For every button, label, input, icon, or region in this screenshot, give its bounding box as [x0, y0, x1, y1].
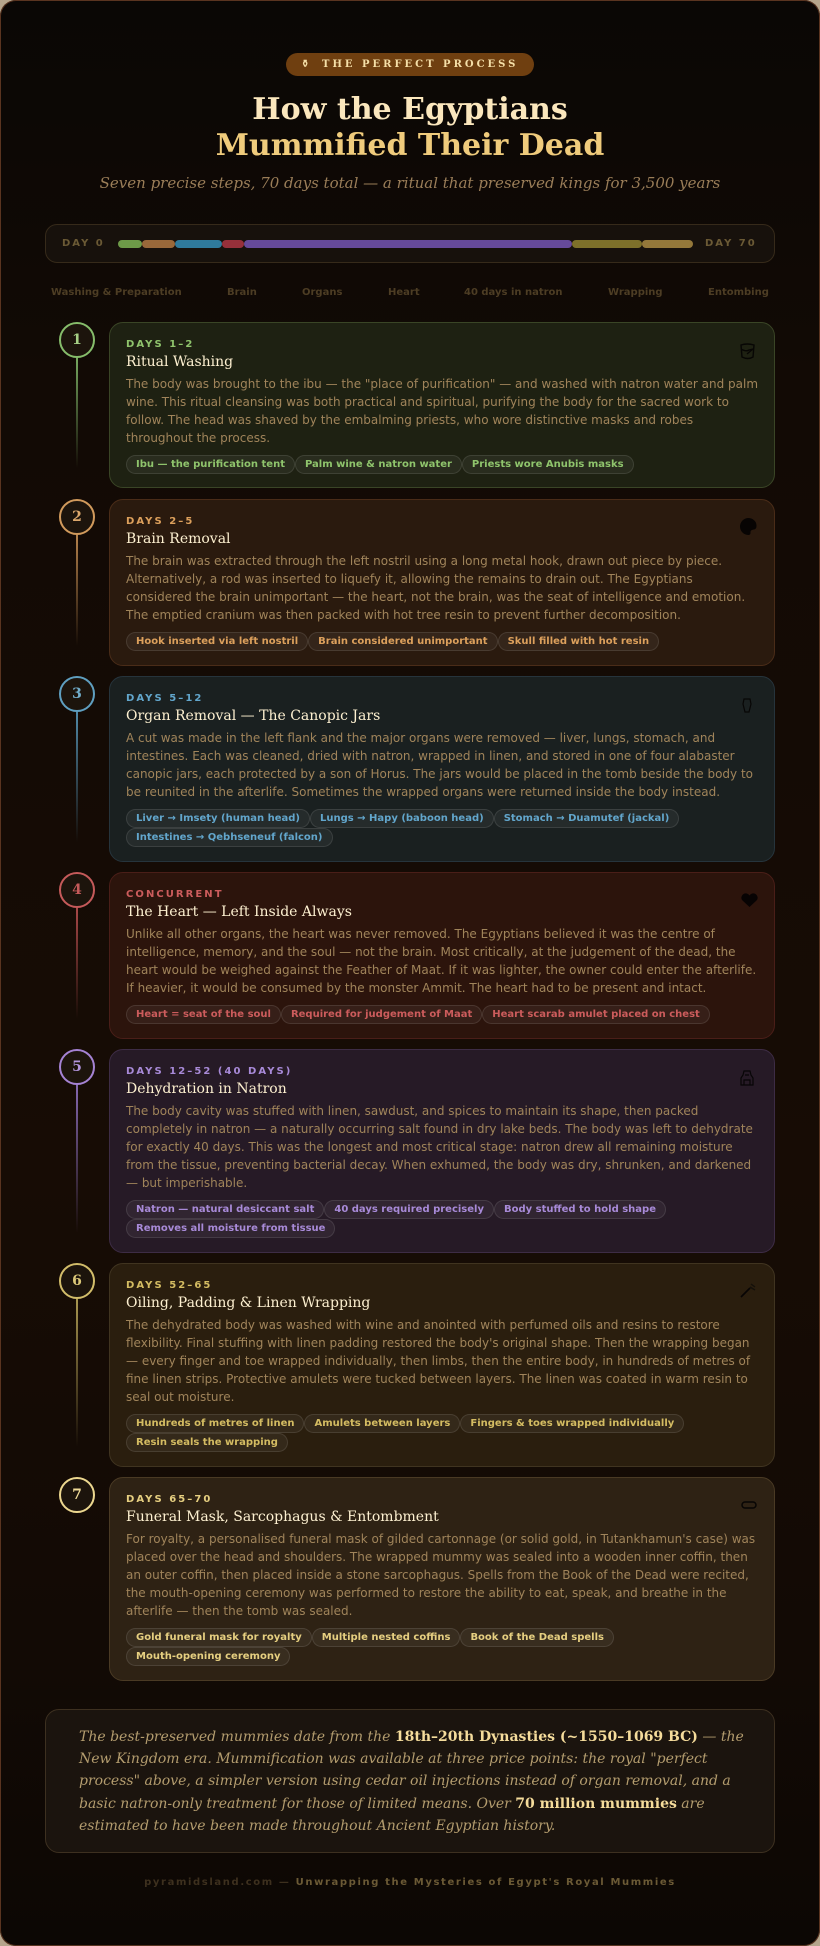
- body text: from the tissue, preventing bacterial decay. When exhumed, the body was dry, shrunken, and darkened: [126, 1158, 751, 1172]
- body text: The brain was extracted through the left nostril using a long metal hook, drawn out piece by piece.: [126, 554, 722, 568]
- badge: the perfect process: [286, 53, 534, 76]
- closing note panel: basic natron-only treatment for those of limited means. Over 70 million mummies are: [79, 1796, 705, 1812]
- tags: Multiple nested coffins: [322, 1632, 450, 1643]
- tags: Lungs → Hapy (baboon head): [320, 813, 484, 824]
- tags: Mouth-opening ceremony: [136, 1651, 280, 1662]
- tags: Priests wore Anubis masks: [472, 459, 624, 470]
- timeline segment: wrapping: [572, 240, 642, 248]
- step 3: organ removal: [59, 676, 775, 862]
- connector line 4: [76, 908, 78, 1019]
- closing note panel: [45, 1709, 775, 1853]
- tags: [126, 632, 659, 651]
- body text: The body was brought to the ibu — the "place of purification" — and washed with natron water and palm: [126, 377, 758, 391]
- step number 6: [59, 1263, 95, 1299]
- icon: heart: [741, 893, 758, 907]
- body text: [126, 731, 753, 799]
- icon: salt: [740, 1070, 754, 1086]
- subtitle: Seven precise steps, 70 days total — a ritual that preserved kings for 3,500 years: [100, 174, 720, 192]
- connector line 6: [76, 1299, 78, 1447]
- step 2: brain removal: [59, 499, 775, 666]
- connector line 5: [76, 1085, 78, 1233]
- footer: pyramidsland.com — Unwrapping the Mysteries of Egypt's Royal Mummies: [144, 1877, 676, 1888]
- tags: [126, 809, 679, 847]
- body text: intelligence, memory, and the soul — not the brain. Most critically, at the judgement of the dead, the: [126, 945, 736, 959]
- tags: Brain considered unimportant: [318, 636, 488, 647]
- body text: an outer coffin, then placed inside a stone sarcophagus. Spells from the Book of the Dead were recited,: [126, 1568, 749, 1582]
- card: ritual washing: [109, 322, 775, 488]
- tags: Intestines → Qebhseneuf (falcon): [136, 832, 322, 843]
- tags: Required for judgement of Maat: [291, 1009, 472, 1020]
- step number 7: [59, 1477, 95, 1513]
- card: organ removal: [109, 676, 775, 862]
- body text: A cut was made in the left flank and the major organs were removed — liver, lungs, stomach, and: [126, 731, 715, 745]
- timeline start label: DAY 0: [62, 238, 105, 249]
- timeline segment: heart: [222, 240, 244, 248]
- title: Mummified Their Dead: [216, 128, 604, 163]
- body text: the mouth-opening ceremony was performed to restore the ability to eat, speak, and breathe in the: [126, 1586, 727, 1600]
- body text: [126, 1532, 755, 1618]
- body text: — but imperishable.: [126, 1176, 247, 1190]
- connector line 1: [76, 358, 78, 468]
- tags: Ibu — the purification tent: [136, 459, 285, 470]
- tags: 40 days required precisely: [334, 1204, 484, 1215]
- body text: The body cavity was stuffed with linen, sawdust, and spices to maintain its shape, then packed: [126, 1104, 698, 1118]
- body text: The dehydrated body was washed with wine and anointed with perfumed oils and resins to restore: [126, 1318, 720, 1332]
- tags: Stomach → Duamutef (jackal): [504, 813, 669, 824]
- card: wrapping: [109, 1263, 775, 1467]
- timeline label: wrapping: Wrapping: [608, 287, 663, 298]
- step number 6: 6: [72, 1273, 82, 1289]
- tags: Body stuffed to hold shape: [504, 1204, 656, 1215]
- timeline segment: entombing: [642, 240, 693, 248]
- card: funeral mask: [109, 1477, 775, 1681]
- body text: [126, 377, 758, 445]
- timeline label: brain: Brain: [227, 287, 257, 298]
- card: the heart: [109, 872, 775, 1039]
- body text: flexibility. Final stuffing with linen padding restored the body's original shape. Then the wrapping began: [126, 1336, 750, 1350]
- step number 3: [59, 676, 95, 712]
- tags: Skull filled with hot resin: [508, 636, 649, 647]
- tags: Hundreds of metres of linen: [136, 1418, 294, 1429]
- step number 5: 5: [72, 1059, 82, 1075]
- tags: Heart = seat of the soul: [136, 1009, 271, 1020]
- icon: basin: [740, 343, 755, 360]
- card: brain removal: [109, 499, 775, 666]
- tags: [126, 455, 634, 474]
- heading: The Heart — Left Inside Always: [126, 904, 352, 920]
- title: How the Egyptians: [252, 92, 568, 127]
- body text: intestines. Each was cleaned, dried with natron, wrapped in linen, and stored in one of four alabaster: [126, 749, 735, 763]
- body text: For royalty, a personalised funeral mask of gilded cartonnage (or solid gold, in Tutankhamun's case) was: [126, 1532, 755, 1546]
- icon: wand: [740, 1284, 756, 1298]
- body text: Alternatively, a rod was inserted to liquefy it, allowing the remains to drain out. The Egyptians: [126, 572, 693, 586]
- timeline label: entombing: Entombing: [708, 287, 769, 298]
- tags: [126, 1628, 614, 1666]
- date label: DAYS 12–52 (40 DAYS): [126, 1066, 292, 1077]
- icon: brain: [740, 518, 756, 535]
- tags: Resin seals the wrapping: [136, 1437, 278, 1448]
- step 1: ritual washing: [59, 322, 775, 488]
- tags: Fingers & toes wrapped individually: [470, 1418, 674, 1429]
- body text: The emptied cranium was then packed with hot tree resin to prevent further decomposition.: [126, 608, 681, 622]
- card: dehydration: [109, 1049, 775, 1253]
- icon: coffin: [741, 1501, 757, 1509]
- body text: fine linen strips. Protective amulets were tucked between layers. The linen was coated in warm resin to: [126, 1372, 748, 1386]
- body text: [126, 927, 756, 995]
- badge: the perfect process: THE PERFECT PROCESS: [322, 59, 518, 70]
- body text: throughout the process.: [126, 431, 270, 445]
- tags: Removes all moisture from tissue: [136, 1223, 325, 1234]
- body text: placed over the head and shoulders. The wrapped mummy was sealed into a wooden inner coffin, then: [126, 1550, 748, 1564]
- timeline segment: organs: [175, 240, 222, 248]
- step 5: dehydration in natron: [59, 1049, 775, 1253]
- timeline end label: DAY 70: [705, 238, 757, 249]
- step number 3: 3: [72, 686, 82, 702]
- closing note panel: New Kingdom era. Mummification was available at three price points: the royal "perfect: [79, 1751, 708, 1767]
- step number 7: 7: [72, 1487, 82, 1503]
- body text: afterlife — then the tomb was sealed.: [126, 1604, 352, 1618]
- step number 4: 4: [72, 882, 82, 898]
- tags: [126, 1200, 666, 1238]
- tags: [126, 1005, 710, 1024]
- badge: the perfect process: ⚱: [301, 59, 309, 70]
- body text: If heavier, it would be consumed by the monster Ammit. The heart had to be present and intact.: [126, 981, 706, 995]
- date label: DAYS 65–70: [126, 1494, 212, 1505]
- tags: Amulets between layers: [314, 1418, 450, 1429]
- tags: Hook inserted via left nostril: [136, 636, 298, 647]
- step number 1: 1: [72, 332, 82, 348]
- step number 2: 2: [72, 509, 82, 525]
- step 6: oiling and wrapping: [59, 1263, 775, 1467]
- date label: DAYS 1–2: [126, 339, 194, 350]
- body text: be reunited in the afterlife. Sometimes the wrapped organs were returned inside the body instead.: [126, 785, 720, 799]
- timeline bar panel: [45, 224, 775, 263]
- tags: Palm wine & natron water: [305, 459, 452, 470]
- closing note panel: The best-preserved mummies date from the 18th–20th Dynasties (~1550–1069 BC) — the: [79, 1728, 744, 1744]
- step 4: the heart: [59, 872, 775, 1039]
- body text: [126, 554, 745, 622]
- tags: [126, 1414, 684, 1452]
- body text: [126, 1318, 750, 1404]
- body text: [126, 1104, 753, 1190]
- tags: Liver → Imsety (human head): [136, 813, 300, 824]
- timeline segment: natron: [244, 240, 572, 248]
- step number 5: [59, 1049, 95, 1085]
- closing note panel: estimated to have been made throughout Ancient Egyptian history.: [79, 1818, 555, 1834]
- tags: Gold funeral mask for royalty: [136, 1632, 302, 1643]
- date label: DAYS 52–65: [126, 1280, 212, 1291]
- heading: Brain Removal: [126, 531, 231, 547]
- icon: canopic jar: [742, 698, 752, 712]
- body text: follow. The head was shaved by the embalming priests, who wore distinctive masks and robes: [126, 413, 693, 427]
- date label: CONCURRENT: [126, 889, 224, 900]
- body text: completely in natron — a naturally occurring salt found in dry lake beds. The body was left to dehydrate: [126, 1122, 753, 1136]
- timeline label: natron: 40 days in natron: [464, 287, 563, 298]
- step 7: funeral mask: [59, 1477, 775, 1681]
- heading: Ritual Washing: [126, 354, 233, 370]
- timeline label: organs: Organs: [302, 287, 342, 298]
- title: [216, 92, 604, 163]
- closing note panel: process" above, a simpler version using cedar oil injections instead of organ removal, and a: [79, 1773, 731, 1789]
- timeline label: washing: Washing & Preparation: [51, 287, 182, 298]
- timeline segment: washing: [118, 240, 142, 248]
- heading: Dehydration in Natron: [126, 1081, 287, 1097]
- heading: Funeral Mask, Sarcophagus & Entombment: [126, 1509, 439, 1525]
- body text: canopic jars, each protected by a son of Horus. The jars would be placed in the tomb beside the body to: [126, 767, 753, 781]
- body text: heart would be weighed against the Feather of Maat. If it was lighter, the owner could enter the afterlife.: [126, 963, 756, 977]
- body text: — every finger and toe wrapped individually, then limbs, then the entire body, in hundreds of metres of: [126, 1354, 750, 1368]
- step number 2: [59, 499, 95, 535]
- connector line 2: [76, 535, 78, 646]
- step number 1: [59, 322, 95, 358]
- body text: Unlike all other organs, the heart was never removed. The Egyptians believed it was the centre of: [126, 927, 715, 941]
- date label: DAYS 2–5: [126, 516, 194, 527]
- date label: DAYS 5–12: [126, 693, 203, 704]
- timeline segment: brain: [142, 240, 175, 248]
- body text: for exactly 40 days. This was the longest and most critical stage: natron drew all remaining moisture: [126, 1140, 733, 1154]
- body text: considered the brain unimportant — the heart, not the brain, was the seat of intelligence and emotion.: [126, 590, 745, 604]
- timeline label: heart: Heart: [388, 287, 420, 298]
- body text: seal out moisture.: [126, 1390, 234, 1404]
- step number 4: [59, 872, 95, 908]
- heading: Organ Removal — The Canopic Jars: [126, 708, 380, 724]
- tags: Natron — natural desiccant salt: [136, 1204, 314, 1215]
- tags: Heart scarab amulet placed on chest: [492, 1009, 700, 1020]
- heading: Oiling, Padding & Linen Wrapping: [126, 1295, 370, 1311]
- body text: wine. This ritual cleansing was both practical and spiritual, purifying the body for the sacred work to: [126, 395, 729, 409]
- tags: Book of the Dead spells: [470, 1632, 604, 1643]
- connector line 3: [76, 712, 78, 842]
